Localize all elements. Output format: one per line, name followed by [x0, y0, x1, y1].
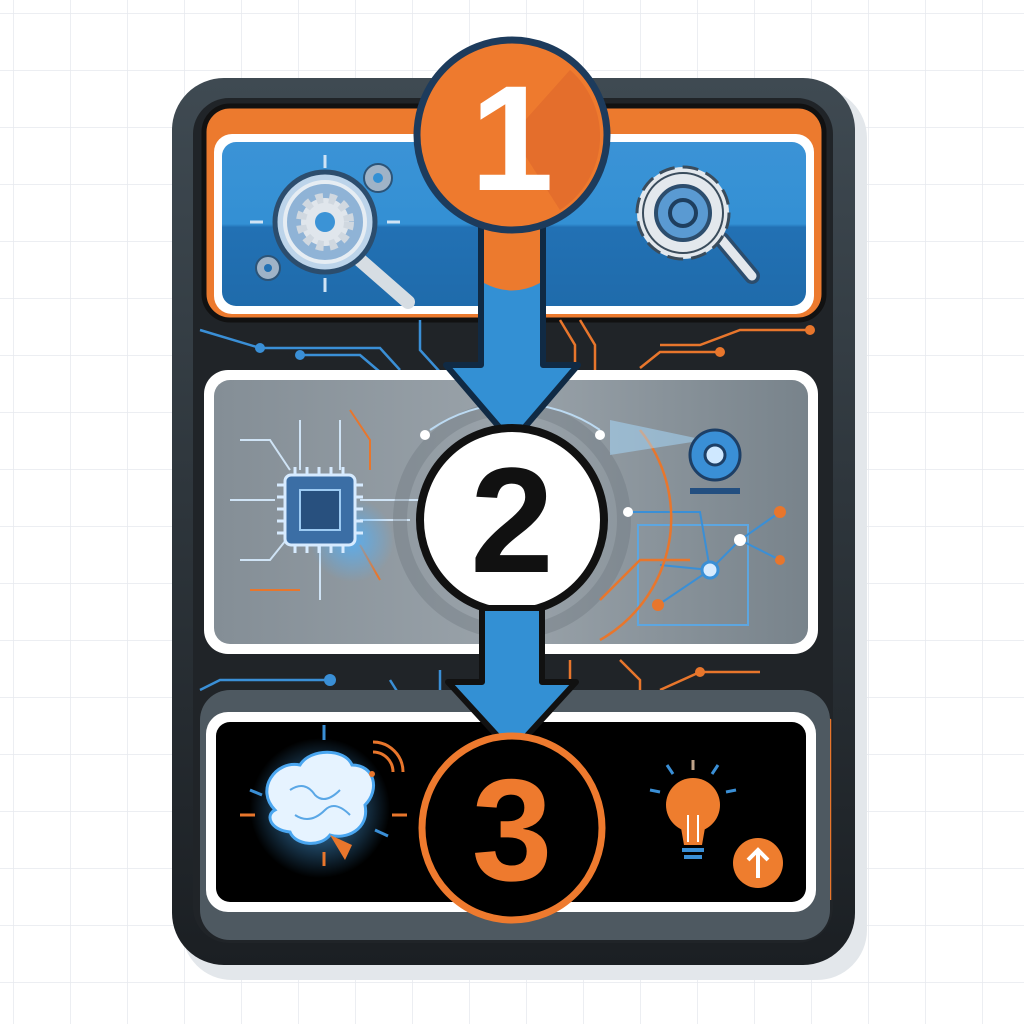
- icon: glowing brain: [240, 725, 407, 878]
- step 1 badge: 1: [470, 54, 554, 222]
- step 3 badge: 3: [472, 749, 552, 911]
- icon: chip circuit: [230, 410, 440, 600]
- panel 3: insight: [200, 690, 830, 940]
- step 3 badge: [422, 736, 602, 920]
- icon: magnifier with gears: [250, 155, 408, 302]
- arrow: 2 to 3: [448, 608, 576, 752]
- step 2 badge: 2: [470, 436, 554, 604]
- panel 1: analysis: [204, 106, 824, 320]
- icon: up arrow badge: [733, 838, 783, 888]
- outer frame: [172, 78, 855, 965]
- network graph: [400, 404, 786, 640]
- panel 2: processing: [204, 370, 818, 654]
- icon: diving helmet with beam: [610, 420, 740, 494]
- icon: gear with magnifier: [637, 167, 752, 276]
- arrow: 1 to 2: [446, 225, 578, 442]
- shadow: [182, 88, 867, 980]
- step 1 badge: [417, 40, 607, 230]
- step 2 badge: [420, 428, 604, 612]
- circuit traces: [200, 320, 830, 900]
- icon: light bulb: [650, 760, 736, 857]
